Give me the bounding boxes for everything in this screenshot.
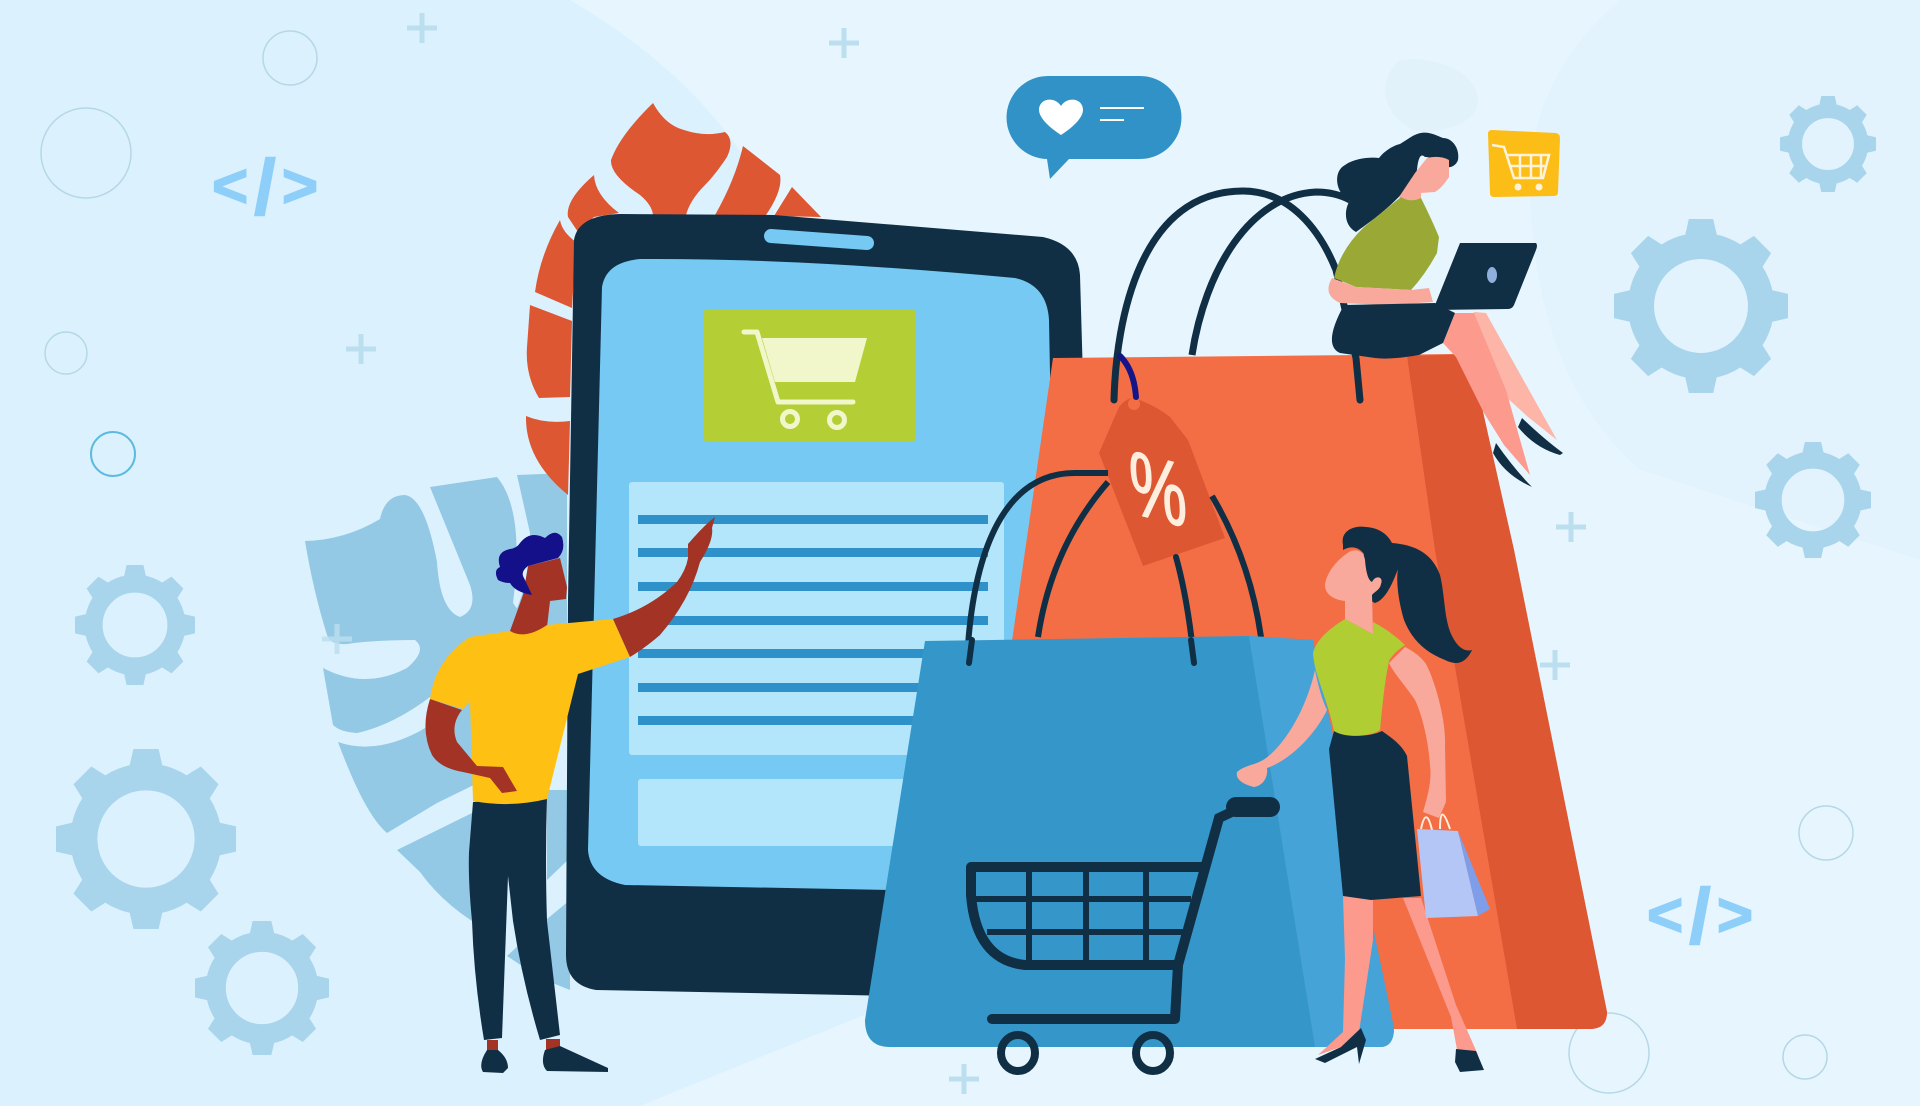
price tag: %: [1127, 430, 1189, 547]
orange leaf: [526, 103, 821, 495]
cart card: [704, 309, 915, 442]
arm: [1328, 278, 1433, 305]
code symbol right: >: [1717, 881, 1753, 950]
blue shopping bag: [865, 636, 1394, 1047]
laptop: [1433, 243, 1537, 310]
yellow cart badge: [1488, 130, 1560, 197]
code symbol left: >: [282, 152, 318, 221]
code symbol right: /: [1689, 872, 1711, 960]
hair: [1337, 133, 1458, 232]
shoes: [1493, 418, 1563, 487]
back leg: [1466, 312, 1557, 440]
man pointing: [425, 517, 715, 1073]
small shopping bag: [1417, 814, 1490, 918]
phone screen: [588, 259, 1055, 892]
top: [1313, 619, 1405, 736]
front leg: [1443, 313, 1530, 475]
cart icon: [744, 332, 867, 428]
shoes: [481, 1046, 608, 1073]
front leg: [1318, 896, 1373, 1055]
price tag: [1099, 356, 1225, 566]
blue shopping bag handles: [967, 473, 1261, 661]
skirt: [1332, 303, 1455, 359]
hair: [1343, 527, 1472, 663]
phone: [566, 214, 1090, 998]
neck and head: [510, 558, 567, 640]
raised arm: [613, 517, 715, 657]
left arm: [1237, 670, 1327, 787]
sweater: [1334, 197, 1439, 290]
woman seated on bag: [1328, 133, 1563, 487]
code symbol left: /: [254, 143, 276, 231]
shirt: [430, 619, 630, 804]
orange shopping bag: [960, 191, 1607, 1029]
message lines: [1100, 108, 1144, 120]
face: [1399, 157, 1449, 202]
heels: [1315, 1028, 1484, 1072]
hip arm: [425, 699, 517, 793]
blue monstera leaf: [305, 473, 570, 990]
hair: [496, 533, 563, 595]
decorative plus signs: [346, 13, 1586, 1094]
skirt: [1329, 731, 1421, 900]
pants: [469, 797, 560, 1040]
right arm: [1389, 647, 1446, 818]
speech bubble: [1007, 76, 1181, 179]
phone speaker: [771, 236, 867, 243]
code symbol left: <: [212, 152, 248, 221]
heart: [1039, 100, 1083, 135]
plus sign on leaf: [322, 624, 352, 654]
button panel: [638, 779, 928, 846]
face and neck: [1325, 550, 1382, 634]
code symbol right: <: [1647, 881, 1683, 950]
laptop logo: [1487, 267, 1497, 283]
bag handles: [1114, 191, 1360, 400]
back leg: [1403, 898, 1478, 1055]
shopping cart: [971, 807, 1270, 1071]
socks: [487, 1039, 560, 1050]
phone body: [566, 214, 1090, 998]
woman with ponytail: [1237, 527, 1490, 1072]
text panel: [629, 482, 1004, 755]
